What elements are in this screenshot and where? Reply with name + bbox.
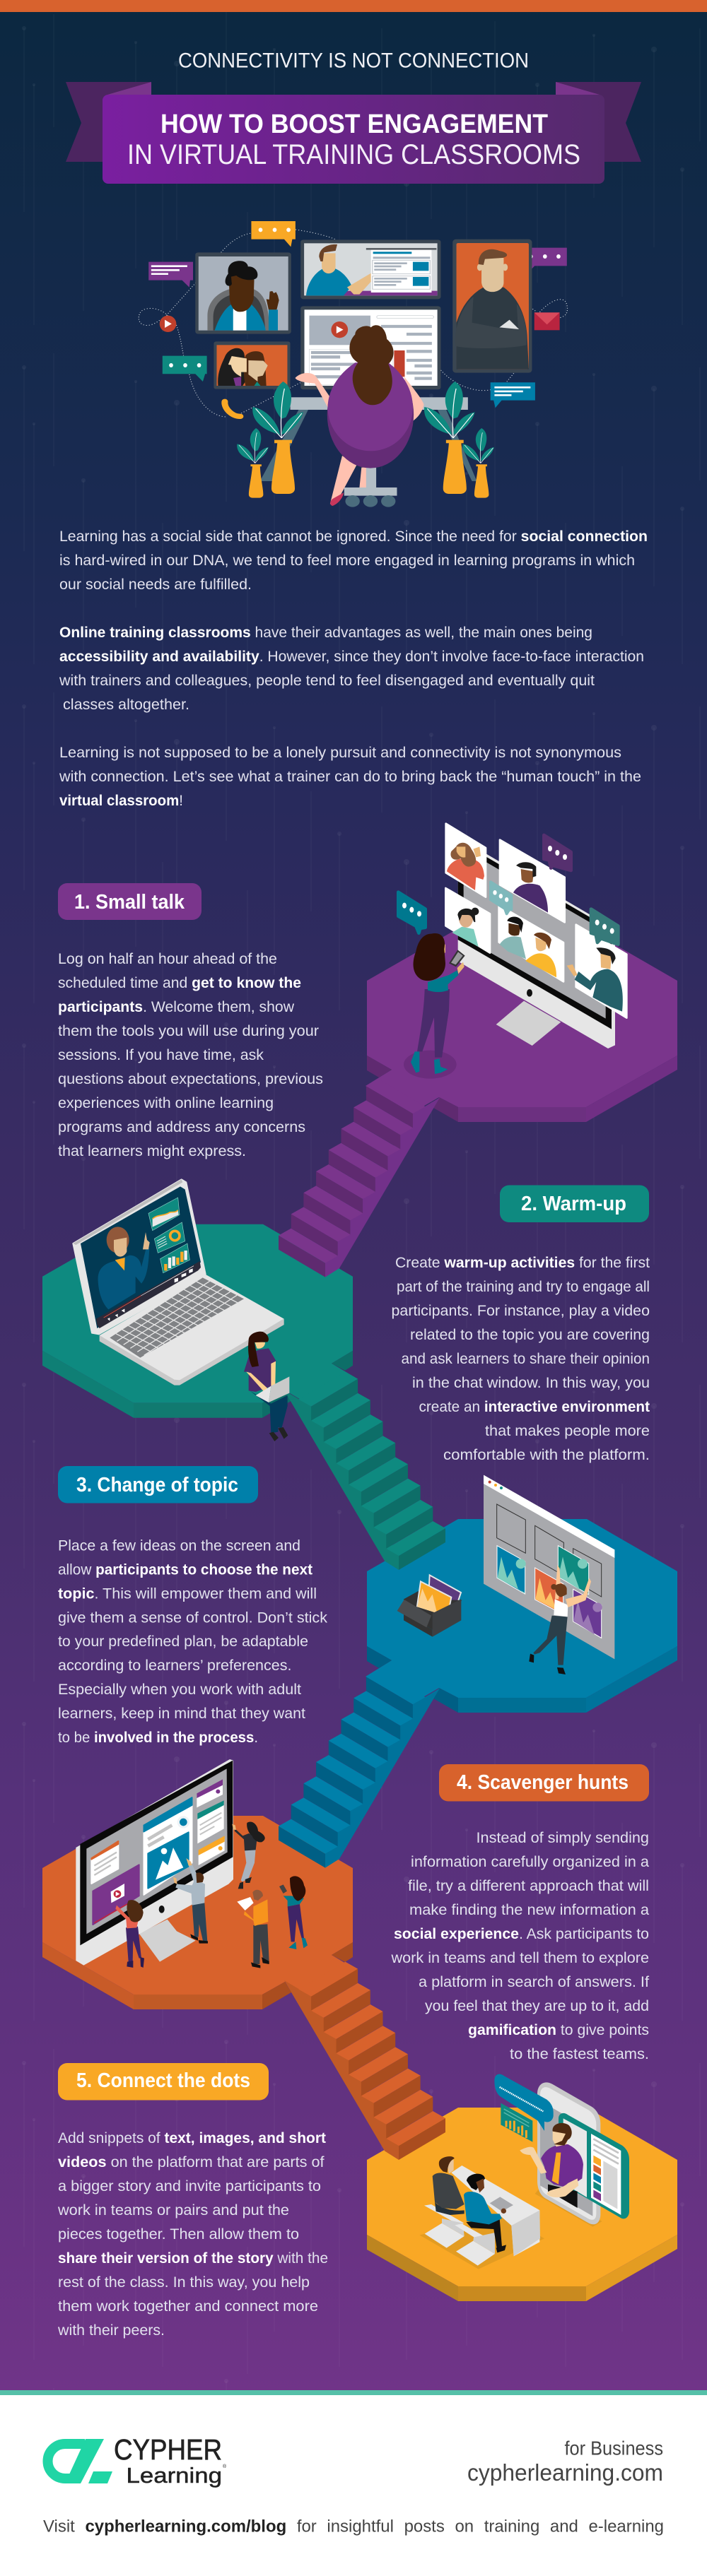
logo: ® — [223, 2464, 227, 2469]
step 1 text: them the tools you will use during your — [58, 1022, 319, 1039]
step 5 text: pieces together. Then allow them to — [58, 2226, 299, 2243]
video card: purple sweater man — [500, 840, 565, 922]
step 1 text: scheduled time and get to know the — [58, 974, 301, 991]
step 1 text: participants. Welcome them, show — [58, 998, 294, 1015]
monitor stand — [496, 1001, 561, 1046]
desk and seats shadow — [419, 2216, 544, 2269]
connector dotted lines — [139, 230, 568, 417]
on-screen charts — [148, 1198, 189, 1273]
step 4 text: make finding the new information a — [409, 1901, 649, 1918]
contact details — [467, 2438, 663, 2486]
step 3 text: Especially when you work with adult — [58, 1681, 301, 1698]
platform 1: purple — [366, 928, 677, 1122]
phone — [537, 2082, 600, 2224]
seated woman in blue — [464, 2174, 506, 2252]
platform 5: yellow — [367, 2108, 677, 2301]
video card: teal sweater man — [567, 925, 626, 1018]
step 4 badge — [439, 1764, 649, 1802]
step 4 text: information carefully organized in a — [411, 1853, 649, 1870]
standing woman with phone — [404, 933, 465, 1079]
paragraph 3: virtual classroom! — [59, 792, 183, 809]
plants in vases — [237, 382, 494, 498]
step 1: small talk — [58, 883, 323, 1159]
step 2 badge: 2. Warm-up — [521, 1193, 626, 1215]
step 2 text: in the chat window. In this way, you — [412, 1374, 650, 1391]
woman seen from behind on chair — [295, 325, 423, 507]
step 4 text: to the fastest teams. — [510, 2045, 649, 2062]
step 2 text: create an interactive environment — [419, 1398, 650, 1415]
step 1 badge: 1. Small talk — [74, 891, 185, 914]
step 2: warm-up — [392, 1186, 650, 1463]
step 4 badge: 4. Scavenger hunts — [457, 1771, 629, 1794]
paragraph 1: Learning has a social side that cannot be ignored. Since the need for social connection — [59, 528, 648, 545]
step 3 text: Place a few ideas on the screen and — [58, 1537, 300, 1554]
step 2 badge — [500, 1186, 649, 1222]
step 2 text — [392, 1254, 650, 1463]
step 3 text: allow participants to choose the next — [58, 1561, 312, 1578]
video card: girl with bun — [445, 888, 490, 953]
icon: red envelope — [534, 312, 560, 330]
step 4 text: you feel that they are up to it, add — [425, 1997, 649, 2014]
platform 2: teal — [42, 1224, 358, 1418]
step 5 text: Add snippets of text, images, and short — [58, 2129, 326, 2146]
platforms and staircases — [42, 928, 677, 2301]
staircase 3: blue — [279, 1670, 440, 1868]
step 5 text: with their peers. — [57, 2322, 165, 2339]
step 1 badge — [58, 883, 201, 920]
logo — [48, 2433, 227, 2488]
video panel: woman waving — [195, 252, 291, 334]
on-screen presenter — [98, 1227, 150, 1309]
step 2 text: part of the training and try to engage all — [397, 1278, 650, 1295]
icon: phone — [225, 401, 240, 416]
step 1 text — [58, 950, 323, 1159]
person: woman with phone — [279, 1876, 308, 1949]
box of pictures — [397, 1575, 462, 1637]
intro paragraphs — [59, 528, 648, 809]
screen cards — [91, 1779, 225, 1925]
step 3 text: according to learners’ preferences. — [58, 1657, 291, 1674]
illustration 5: trainer on phone with seated learners — [419, 2074, 629, 2269]
step 1 text: Log on half an hour ahead of the — [58, 950, 277, 967]
person: man reaching up — [173, 1858, 208, 1944]
step 4 text: gamification to give points — [468, 2021, 649, 2038]
step 2 text: participants. For instance, play a video — [392, 1302, 650, 1319]
title ribbon — [66, 82, 641, 184]
illustration 3: woman arranging pictures on board — [397, 1475, 614, 1674]
video panel: man arms crossed — [452, 240, 532, 373]
title text: HOW TO BOOST ENGAGEMENT — [160, 110, 548, 139]
paragraph 2: classes altogether. — [63, 696, 189, 713]
staircase 2: teal — [284, 1372, 445, 1570]
picture board — [484, 1475, 614, 1659]
person: woman in black at screen edge — [232, 1821, 265, 1889]
paragraph 3 — [59, 744, 641, 809]
step 5 badge — [58, 2063, 269, 2100]
speech bubble — [494, 2074, 554, 2131]
step 3 text: learners, keep in mind that they want — [58, 1705, 305, 1722]
chat bubbles — [398, 835, 618, 945]
desk — [260, 397, 477, 481]
step 1 text: experiences with online learning — [58, 1094, 274, 1111]
platform 3: blue — [366, 1519, 677, 1713]
monitor — [458, 837, 615, 1048]
step 4 text — [390, 1829, 649, 2062]
step 5 text: them work together and connect more — [58, 2298, 318, 2315]
person: woman touching video — [115, 1900, 144, 1968]
step 4: scavenger hunts — [390, 1764, 649, 2062]
icon: purple message bubble — [148, 262, 193, 288]
paragraph 2: Online training classrooms have their advantages as well, the main ones being — [59, 624, 592, 641]
step 4 text: file, try a different approach that will — [408, 1877, 649, 1894]
icon: yellow chat bubble — [251, 221, 296, 247]
laptop base and keyboard — [100, 1274, 284, 1386]
logo: CYPHER — [114, 2433, 222, 2466]
video panel: two women — [214, 341, 291, 389]
step 4 text: work in teams and tell them to explore — [390, 1949, 649, 1966]
step 2 text: comfortable with the platform. — [443, 1446, 650, 1463]
icon: blue message bubble — [491, 382, 535, 408]
illustration 2: laptop with video lesson — [73, 1179, 289, 1441]
staircase 1: purple — [279, 1079, 440, 1277]
step 3 text: to be involved in the process. — [58, 1729, 258, 1746]
floating chart — [501, 2103, 532, 2142]
paragraph 2: accessibility and availability. However, since they don’t involve face-to-face interaction — [59, 648, 644, 665]
step 3 text — [58, 1537, 327, 1746]
step 4 text: social experience. Ask participants to — [394, 1925, 649, 1942]
video card: two colleagues — [499, 905, 563, 981]
step 5 text: videos on the platform that are parts of — [58, 2153, 325, 2170]
platform 4: orange — [42, 1816, 358, 2009]
person: man in orange with tablet — [237, 1890, 269, 1968]
step 1 text: that learners might express. — [58, 1142, 246, 1159]
woman hanging picture — [529, 1565, 591, 1674]
big monitor — [76, 1759, 233, 1966]
step 3 text: give them a sense of control. Don’t stick — [58, 1609, 327, 1626]
step 1 text: sessions. If you have time, ask — [58, 1046, 264, 1063]
contact details: for Business — [564, 2438, 663, 2459]
step 4 text: a platform in search of answers. If — [419, 1973, 649, 1990]
hero illustration: woman at desk with video calls — [139, 221, 568, 507]
icon: red play button — [160, 316, 176, 332]
illustration 4: team exploring a large screen — [76, 1759, 308, 1968]
title text — [127, 110, 580, 170]
step 3 text: topic. This will empower them and will — [58, 1585, 317, 1602]
step 1 text: questions about expectations, previous — [58, 1070, 323, 1087]
paragraph 1: is hard-wired in our DNA, we tend to feel more engaged in learning programs in which — [59, 552, 635, 569]
step 5 text: work in teams or pairs and put the — [57, 2202, 289, 2218]
paragraph 1: our social needs are fulfilled. — [59, 576, 252, 593]
step 2 text: related to the topic you are covering — [410, 1326, 650, 1343]
icon: teal chat bubble — [163, 356, 207, 382]
step 5 badge: 5. Connect the dots — [76, 2069, 250, 2092]
step 2 text: that makes people more — [485, 1422, 650, 1439]
staircase 4: orange — [284, 1962, 445, 2160]
step 1 text: programs and address any concerns — [58, 1118, 305, 1135]
phone shadow — [535, 2188, 602, 2227]
step 2 text: Create warm-up activities for the first — [395, 1254, 650, 1271]
step 4 text: Instead of simply sending — [477, 1829, 649, 1846]
paragraph 3: Learning is not supposed to be a lonely pursuit and connectivity is not synonymous — [59, 744, 621, 761]
step 3 text: to your predefined plan, be adaptable — [58, 1633, 308, 1650]
top accent bar — [0, 0, 707, 12]
paragraph 2: with trainers and colleagues, people tend to feel disengaged and eventually quit — [59, 672, 595, 689]
eyebrow heading: CONNECTIVITY IS NOT CONNECTION — [178, 49, 529, 72]
laptop screen — [73, 1179, 206, 1334]
seated man in gray — [433, 2156, 464, 2215]
step 2 text: and ask learners to share their opinion — [402, 1350, 650, 1367]
step 3: change of topic — [58, 1466, 327, 1746]
video panel: man presenting — [300, 240, 440, 299]
video card: red shirt woman — [446, 824, 486, 897]
step 5 text: share their version of the story with the — [58, 2250, 328, 2267]
step 5 text — [57, 2129, 328, 2339]
course panel behind trainer — [559, 2113, 629, 2218]
step 5 text: rest of the class. In this way, you help — [58, 2274, 310, 2291]
step 3 badge — [58, 1466, 258, 1503]
step 5: connect the dots — [57, 2063, 328, 2339]
logo mark — [48, 2439, 112, 2483]
trainer — [520, 2123, 583, 2208]
paragraph 3: with connection. Let’s see what a trainer can do to bring back the “human touch” in the — [59, 768, 641, 785]
girl sitting with laptop — [244, 1332, 289, 1441]
footer — [0, 2390, 707, 2576]
paragraph 1 — [59, 528, 648, 593]
step 3 badge: 3. Change of topic — [76, 1474, 238, 1496]
monitor stand — [139, 1920, 196, 1962]
desk with seats — [424, 2166, 540, 2266]
illustration 1: woman at monitor with video cards — [398, 824, 626, 1079]
main screen with course page — [300, 306, 440, 389]
title text: IN VIRTUAL TRAINING CLASSROOMS — [127, 139, 580, 170]
logo: Learning — [126, 2463, 222, 2488]
contact details: cypherlearning.com — [467, 2459, 663, 2486]
paragraph 2 — [59, 624, 644, 713]
blog call to action: Visit cypherlearning.com/blog for insightful posts on training and e-learning — [43, 2517, 664, 2536]
icon: purple chat bubble right — [522, 248, 567, 273]
pictures on board — [497, 1546, 602, 1638]
step 5 text: a bigger story and invite participants to — [58, 2178, 321, 2194]
